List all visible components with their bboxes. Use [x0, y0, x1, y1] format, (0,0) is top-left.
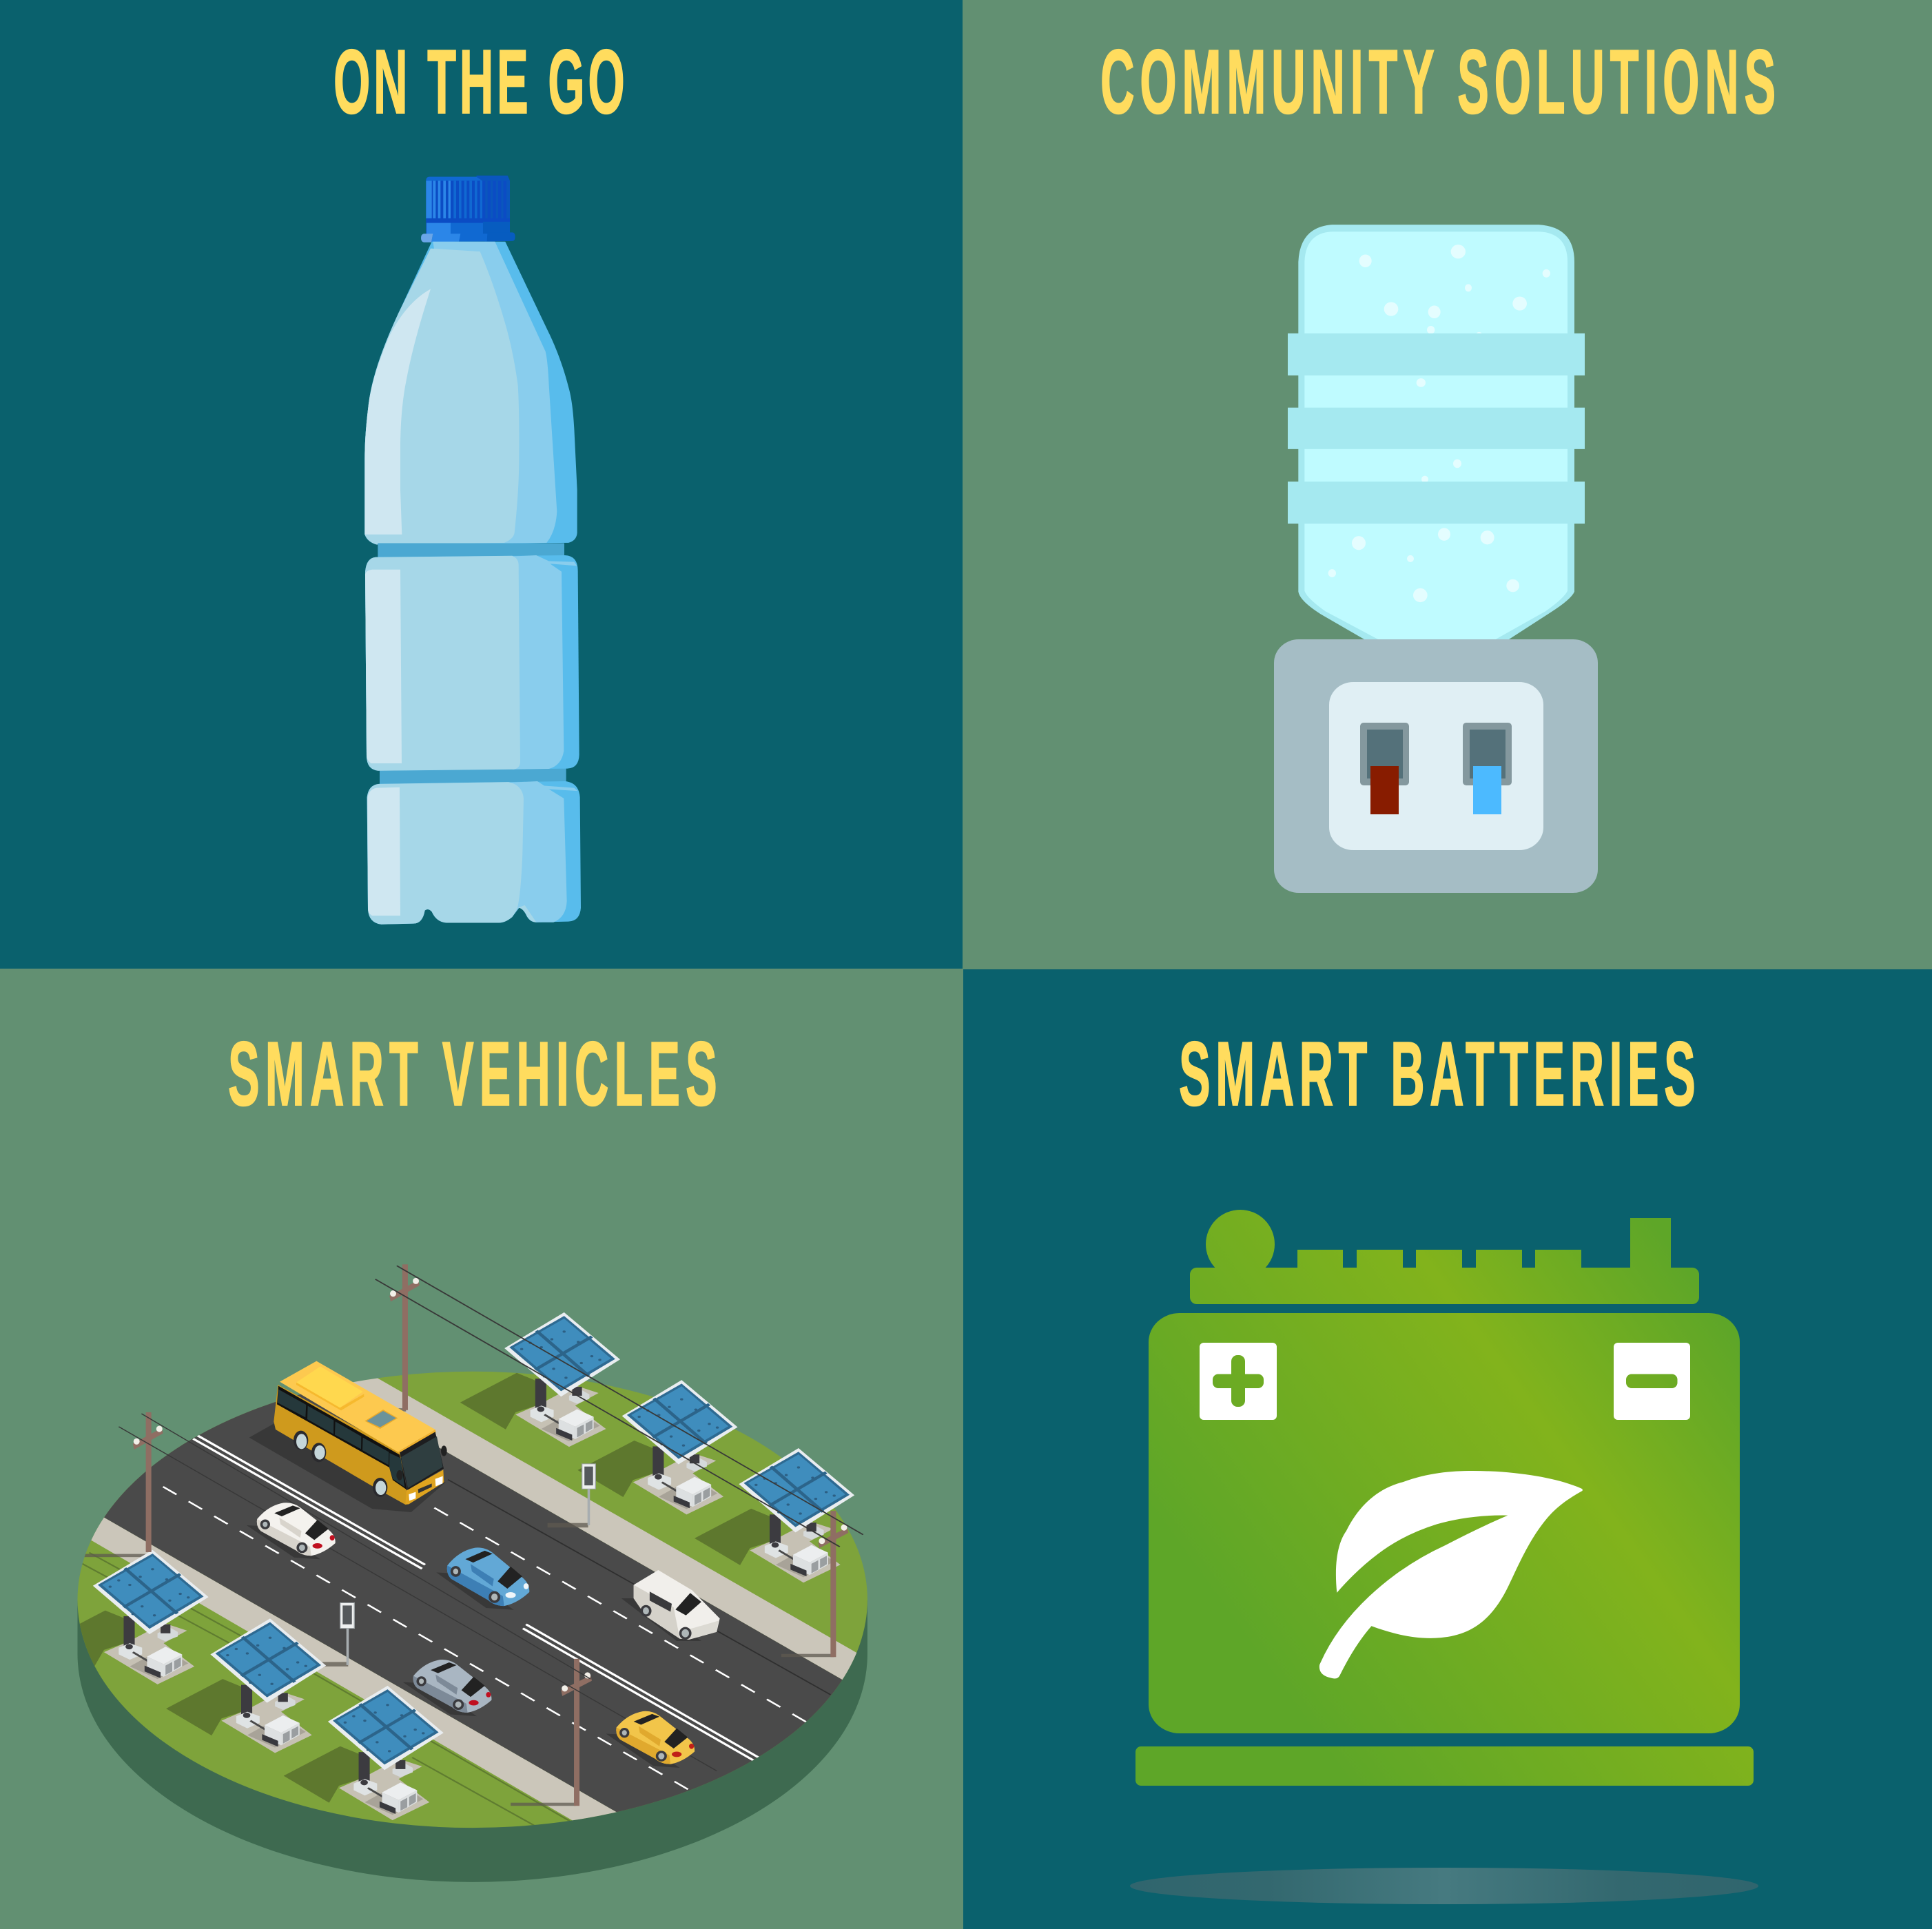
illustration: solar highway: [49, 1264, 923, 1882]
solar panel 4: [93, 1550, 209, 1678]
white sedan: [247, 1503, 336, 1559]
solar panel 1: [504, 1312, 620, 1441]
yellow sedan: [606, 1711, 695, 1768]
title: smart vehicles: SMART VEHICLES: [228, 1024, 717, 1125]
battery body: [1149, 1313, 1740, 1733]
road and grass surface: [77, 1371, 867, 1828]
battery base plate: [1135, 1746, 1754, 1786]
title: community solutions: COMMUNITY SOLUTIONS: [1100, 32, 1776, 133]
solar panel 5: [210, 1618, 326, 1746]
solar panel 6: [328, 1686, 444, 1814]
cold water tap: [1463, 723, 1512, 814]
hot water tap: [1360, 723, 1409, 814]
title: smart batteries: SMART BATTERIES: [1179, 1024, 1696, 1125]
minus sign: [1614, 1343, 1690, 1420]
icon: water jug: [1288, 225, 1585, 639]
disc base: [78, 1600, 867, 1882]
solar panel 2: [622, 1380, 738, 1508]
solar panel 3: [739, 1448, 854, 1576]
panel: smart batteries: [963, 969, 1932, 1929]
overhead wires: [119, 1266, 863, 1771]
grey sedan: [403, 1660, 491, 1716]
road signs: [340, 1464, 595, 1665]
panel: on the go: [0, 0, 963, 969]
white suv: [621, 1570, 720, 1641]
bottle upper body: [364, 242, 577, 545]
title: on the go: ON THE GO: [333, 32, 625, 133]
panel: smart vehicles: [0, 969, 963, 1929]
panel: community solutions: [963, 0, 1932, 969]
icon: leaf: [1319, 1471, 1583, 1679]
icon: water bottle: [364, 176, 581, 925]
bottle cap: [421, 176, 515, 243]
blue sedan: [436, 1547, 529, 1610]
yellow bus: [249, 1361, 447, 1512]
plus sign: [1200, 1343, 1277, 1420]
utility poles: [133, 1264, 848, 1806]
battery terminals and lid: [1190, 1210, 1699, 1304]
icon: battery: [1135, 1210, 1754, 1786]
icon: water dispenser: [1274, 639, 1598, 893]
battery ground shadow: [1130, 1868, 1758, 1904]
bottle lower sections: [365, 543, 581, 925]
